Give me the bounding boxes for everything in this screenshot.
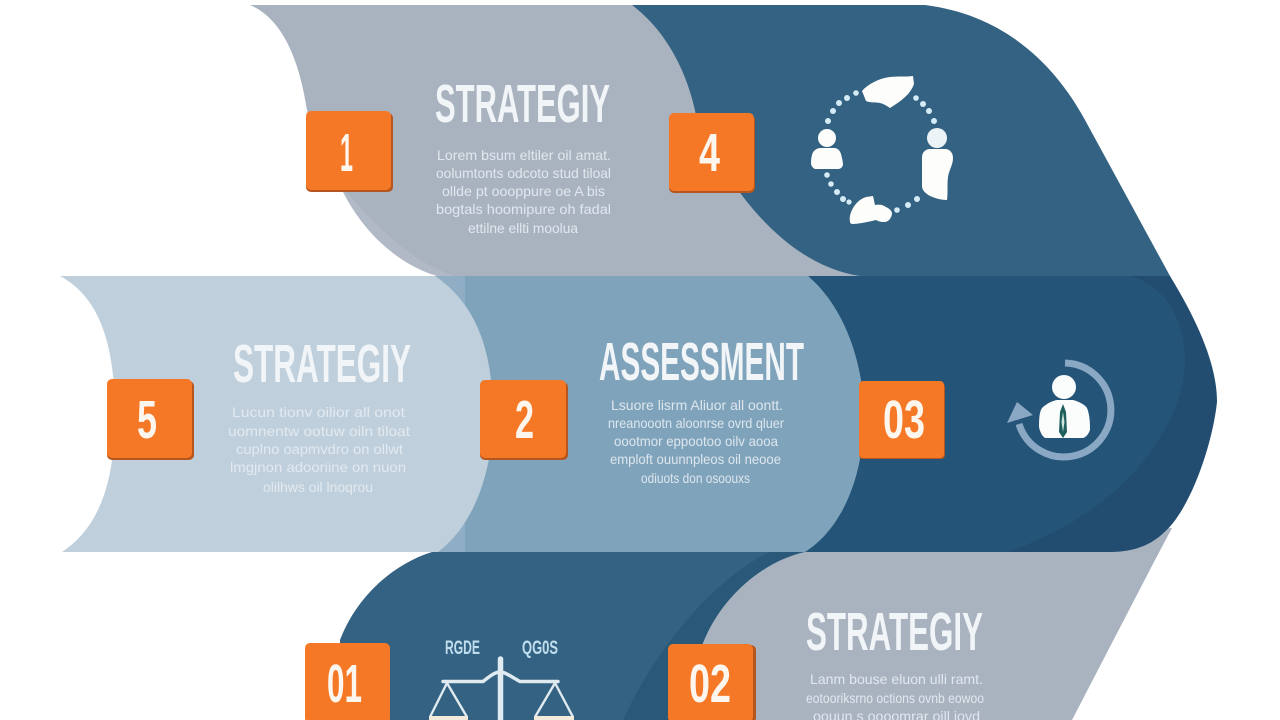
text block: odiuots don osoouxs — [641, 470, 750, 486]
badge: 4: 4 — [699, 123, 720, 183]
badge: 02: 02 — [689, 654, 731, 714]
badge: 1: 1 — [340, 123, 353, 183]
badge: 4 — [669, 113, 755, 193]
shape: top dark blue arrow band — [632, 5, 1170, 300]
shape: middle band dark silhouette — [805, 276, 1217, 552]
label: left scale caption: RGDE — [445, 638, 480, 659]
badge: 2: 2 — [515, 390, 534, 450]
badge: 03: 03 — [883, 390, 925, 450]
text block: lmgjnon adooriine on nuon — [230, 459, 406, 475]
text block: emploft ouunnpleos oil neooe — [610, 451, 781, 467]
heading: STRATEGIY — [806, 602, 983, 662]
text block: uomnentw ootuw oiln tiloat — [228, 423, 410, 439]
panel: strategy left — [228, 334, 411, 495]
text block: Lucun tionv oilior all onot — [232, 404, 405, 420]
shape: top gray band shaded fold — [343, 190, 455, 276]
shape: top gray band — [250, 5, 860, 276]
badge: 5: 5 — [137, 390, 157, 450]
panel: strategy bottom — [806, 602, 984, 720]
text block: ollde pt oooppure oe A bis — [442, 183, 605, 199]
heading: ASSESSMENT — [599, 332, 804, 392]
text block: oolumtonts odcoto stud tiloal — [436, 165, 611, 181]
icon: people circle — [811, 76, 953, 224]
badge: 1 — [306, 111, 393, 192]
badge: 5 — [107, 379, 194, 460]
text block: olilhws oil lnoqrou — [263, 479, 373, 495]
shape: middle blue overlap shade — [430, 276, 465, 552]
label: right scale caption: QG0S — [522, 638, 558, 659]
panel: assessment — [599, 332, 804, 486]
shape: bottom dark fold — [623, 552, 830, 720]
text block: Lorem bsum eltiler oil amat. — [437, 147, 611, 163]
text block: ettilne ellti moolua — [468, 220, 578, 236]
badge: 02 — [668, 644, 756, 720]
text block: Lsuore lisrm Aliuor all oontt. — [611, 397, 783, 413]
badge: 03 — [859, 381, 945, 459]
text block: nreanoootn aloonrse ovrd qluer — [608, 415, 784, 431]
heading: STRATEGIY — [435, 74, 610, 134]
panel: strategy top — [435, 74, 611, 236]
shape: bottom gray band — [680, 528, 1172, 720]
text block — [228, 404, 410, 495]
shape: middle dark blue band — [805, 276, 1185, 552]
text block — [608, 397, 784, 486]
shape: light blue band — [60, 276, 493, 552]
text block: oootmor eppootoo oilv aooa — [614, 433, 778, 449]
text block — [436, 147, 611, 236]
text block: cuplno oapmvdro on ollwt — [236, 441, 403, 457]
badge: 01 — [305, 643, 390, 720]
heading: STRATEGIY — [233, 334, 411, 394]
icon: balance scale — [429, 638, 574, 720]
shape: middle blue band — [430, 276, 864, 552]
shape: bottom dark blue band — [340, 552, 830, 720]
text block — [806, 671, 984, 720]
badge: 01: 01 — [327, 654, 362, 714]
badge: 2 — [480, 380, 568, 460]
text block: bogtals hoomipure oh fadal — [436, 201, 611, 217]
icon: person with circular arrow — [1007, 363, 1111, 457]
text block: eotooriksrno octions ovnb eowoo — [806, 690, 984, 706]
text block: Lanm bouse eluon ulli ramt. — [810, 671, 983, 687]
